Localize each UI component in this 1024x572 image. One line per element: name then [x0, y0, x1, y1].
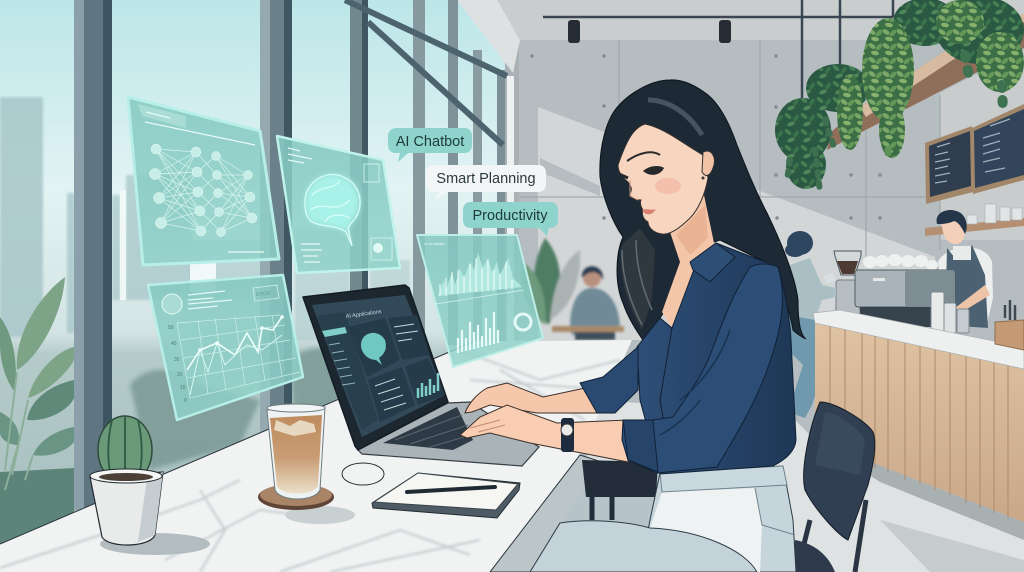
watch	[561, 418, 574, 452]
planter shelf with hanging plants	[775, 0, 1024, 192]
far sleeve	[580, 347, 638, 413]
background seated person	[552, 266, 624, 340]
far arm and hand	[465, 383, 597, 413]
floating panel: line chart	[148, 275, 303, 420]
marble table	[0, 340, 632, 572]
background woman standing	[785, 231, 836, 418]
near sleeve	[622, 264, 782, 473]
espresso machine and grinder	[834, 251, 969, 333]
earbuds case	[342, 463, 384, 485]
laptop	[303, 285, 539, 466]
plant outside left window	[0, 277, 74, 546]
floating panel: line chart: DOCK	[256, 290, 271, 298]
counter with wood panelling	[813, 300, 1024, 522]
floating panel: line chart: 30	[174, 357, 180, 363]
chair	[790, 402, 875, 572]
floating panel: line chart: 40	[171, 341, 177, 347]
laptop screen	[303, 285, 448, 450]
speech bubble: AI Chatbot: AI Chatbot	[396, 134, 464, 150]
wall: concrete	[505, 0, 1024, 572]
laptop base	[358, 402, 539, 466]
stool under table	[560, 460, 665, 530]
floating panel: analytics dashboard	[417, 235, 543, 367]
near arm and hand	[460, 405, 628, 462]
speech bubble: Productivity	[463, 202, 558, 236]
notebook and pen	[372, 473, 520, 518]
floating panel: line chart: 10	[180, 385, 186, 391]
cafe floor	[560, 400, 1024, 572]
window frames	[74, 0, 514, 510]
floating panel: line chart: 20	[177, 372, 183, 378]
shirt body	[637, 243, 796, 474]
floating panel: line chart: 50	[168, 325, 174, 331]
floating panel: analytics dashboard: AI Analytics	[424, 241, 445, 246]
floating panel: glowing brain	[277, 136, 400, 273]
speech bubble: Productivity: Productivity	[473, 208, 548, 224]
neck and chest	[662, 195, 714, 328]
floating panel: line chart: 0	[184, 398, 187, 404]
menu boards	[925, 104, 1024, 204]
hair back	[600, 80, 806, 343]
speech bubble: Smart Planning	[426, 165, 546, 200]
barista	[937, 210, 993, 328]
cactus in white pot	[90, 416, 163, 545]
speech bubble: Smart Planning: Smart Planning	[436, 171, 536, 187]
ear	[702, 151, 714, 175]
ceiling with track lights	[457, 0, 1024, 100]
iced latte on coaster	[258, 404, 334, 510]
floating panel: neural network	[128, 97, 279, 265]
facial features	[627, 152, 660, 161]
trousers	[640, 466, 796, 572]
background plant	[521, 238, 580, 325]
shelf with cups	[925, 204, 1024, 294]
window view: sky and city	[0, 0, 520, 572]
laptop: AI Applications	[345, 309, 382, 320]
speech bubble: AI Chatbot	[388, 128, 472, 162]
face	[618, 124, 708, 234]
woman	[460, 80, 806, 572]
